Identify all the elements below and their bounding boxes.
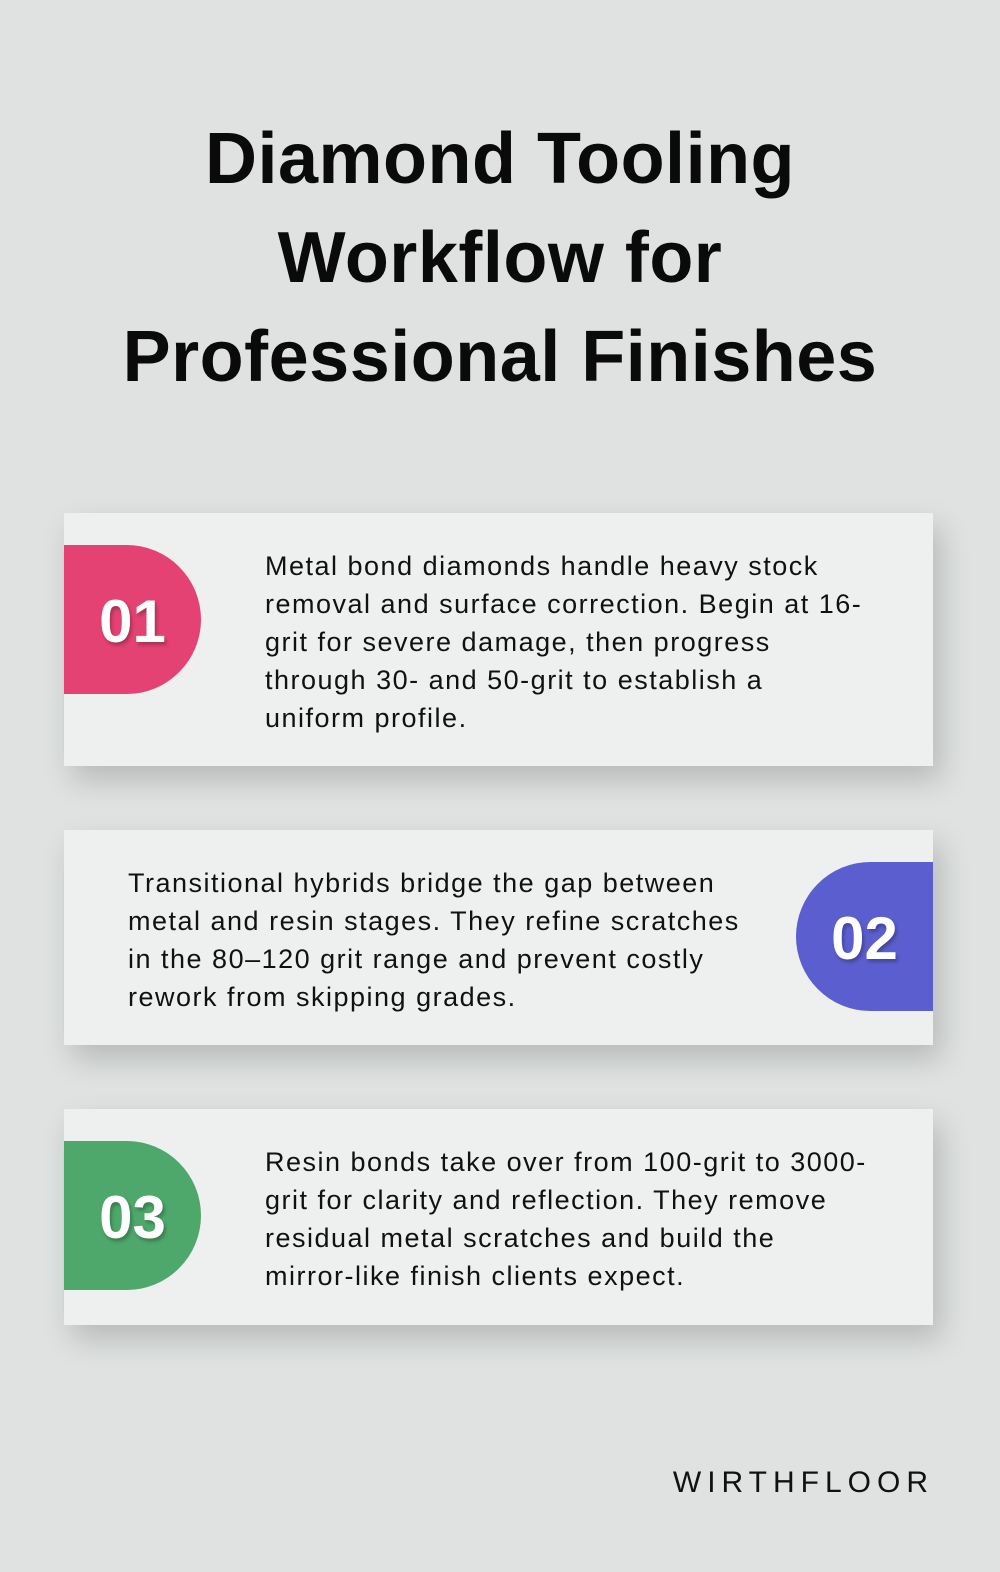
text 3: mirror-like finish clients expect.: [265, 1261, 685, 1291]
text 2: [128, 868, 740, 1012]
badge 03: 03: [99, 1184, 166, 1251]
text 2: in the 80–120 grit range and prevent costly: [128, 944, 704, 974]
text 1: uniform profile.: [265, 703, 468, 733]
text 2: Transitional hybrids bridge the gap between: [128, 868, 715, 898]
title: Professional Finishes: [123, 317, 877, 397]
text 2: metal and resin stages. They refine scratches: [128, 906, 740, 936]
text 3: [265, 1147, 867, 1291]
text 3: residual metal scratches and build the: [265, 1223, 775, 1253]
text 1: Metal bond diamonds handle heavy stock: [265, 551, 819, 581]
text 3: Resin bonds take over from 100-grit to 3000-: [265, 1147, 867, 1177]
badge 01: 01: [99, 588, 166, 655]
badge 02: 02: [831, 905, 898, 972]
brand logo: WIRTHFLOOR: [673, 1466, 934, 1499]
text 1: removal and surface correction. Begin at 16-: [265, 589, 862, 619]
text 1: through 30- and 50-grit to establish a: [265, 665, 763, 695]
card 1: [64, 513, 933, 766]
title: [123, 119, 877, 397]
card 3: [64, 1109, 933, 1325]
title: Diamond Tooling: [205, 119, 795, 199]
card 2: [64, 830, 933, 1045]
text 1: grit for severe damage, then progress: [265, 627, 771, 657]
text 1: [265, 551, 862, 733]
text 2: rework from skipping grades.: [128, 982, 517, 1012]
badge 03: [64, 1141, 201, 1290]
text 3: grit for clarity and reflection. They remove: [265, 1185, 827, 1215]
badge 02: [796, 862, 933, 1011]
title: Workflow for: [278, 218, 722, 298]
badge 01: [64, 545, 201, 694]
